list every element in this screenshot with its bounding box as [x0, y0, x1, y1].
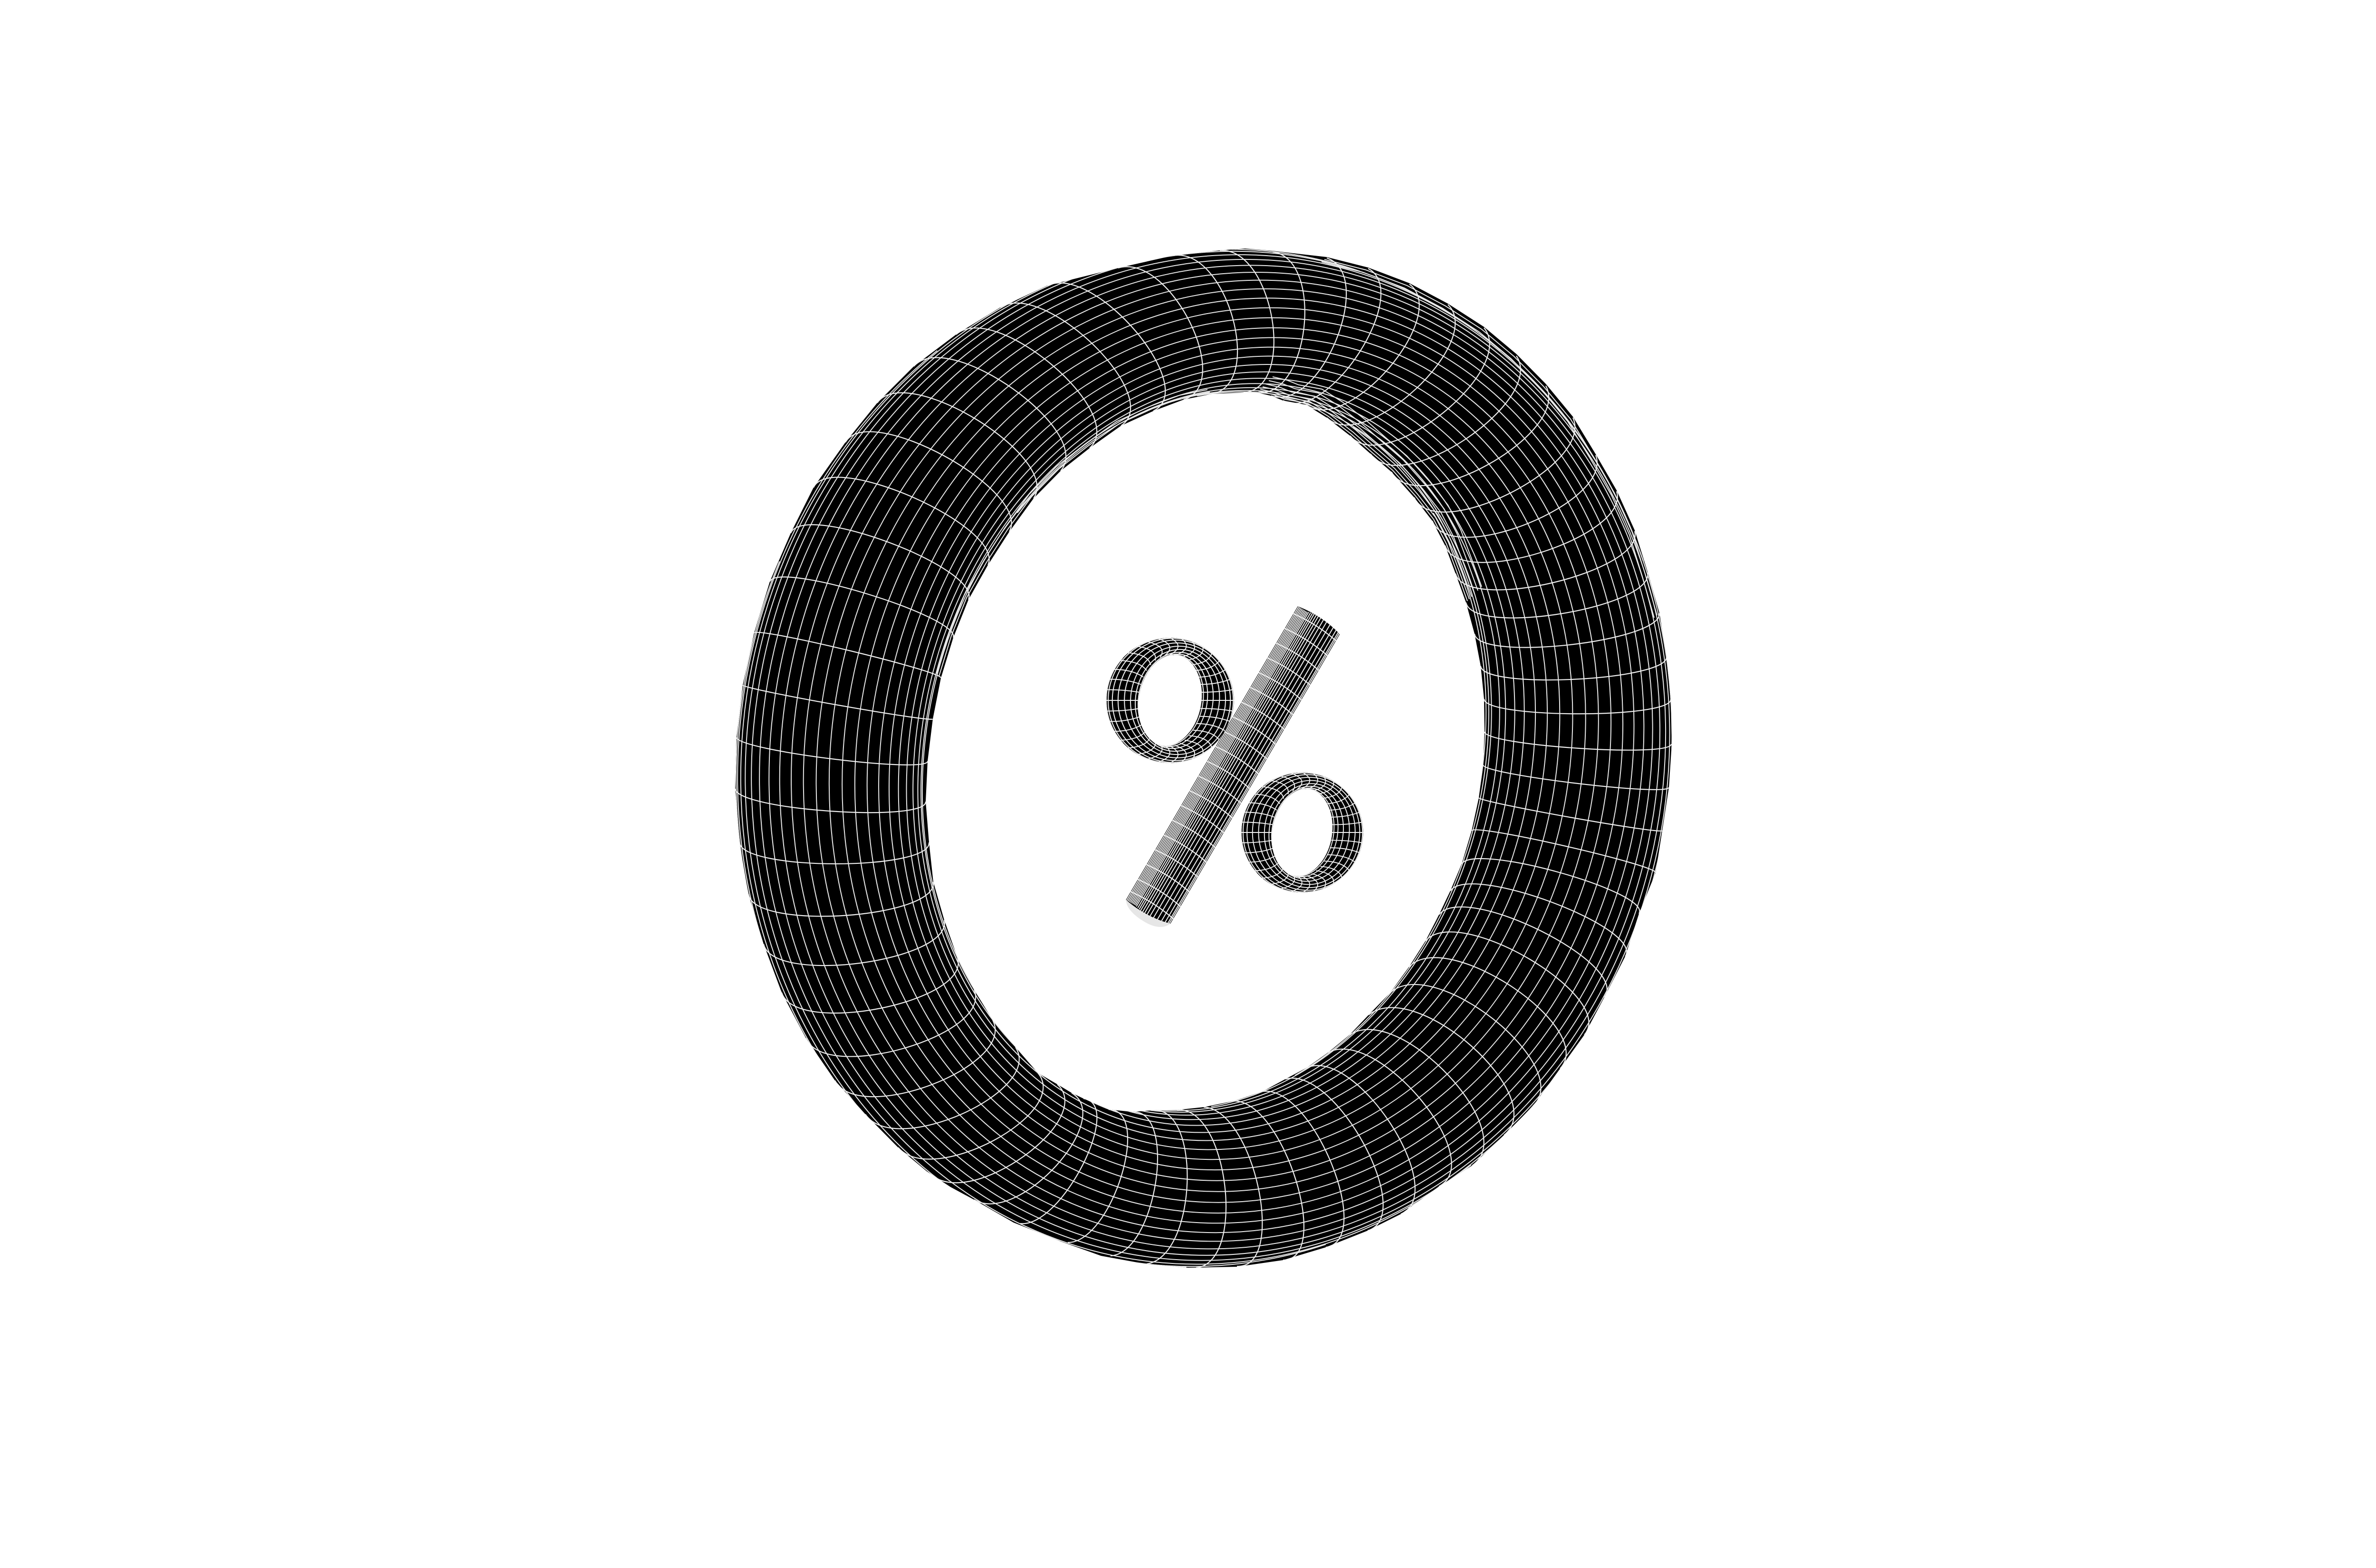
infographic: wireframe ring with percent sign [735, 249, 1672, 1268]
percent sign: slash bar [1121, 605, 1342, 934]
percent sign: upper ring [1106, 638, 1234, 763]
ring mesh: lines around the ring [723, 249, 1691, 1267]
percent sign: lower ring [1241, 772, 1363, 893]
ring body [735, 249, 1672, 1268]
icon: percent sign [1106, 605, 1363, 934]
ring mesh: ribs across the tube [735, 250, 1671, 1268]
icon: large wireframe ring [723, 249, 1691, 1268]
